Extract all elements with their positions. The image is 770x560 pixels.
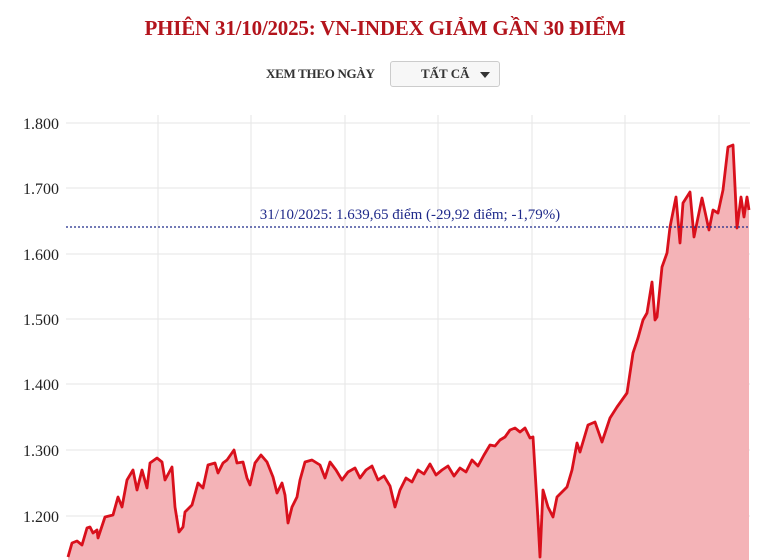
date selector control <box>266 61 500 87</box>
annotation label: 31/10/2025: 1.639,65 điểm (-29,92 điểm; -1,79%) <box>260 207 560 223</box>
title: PHIÊN 31/10/2025: VN-INDEX GIẢM GẦN 30 ĐIỂM <box>144 16 626 40</box>
y axis labels: 1.800 <box>23 116 59 133</box>
label: xem theo ngày: XEM THEO NGÀY <box>266 66 375 81</box>
y axis labels: 1.200 <box>23 509 59 526</box>
y axis labels: 1.500 <box>23 312 59 329</box>
y axis labels: 1.300 <box>23 443 59 460</box>
y axis labels <box>23 116 59 526</box>
y axis labels: 1.400 <box>23 377 59 394</box>
dropdown <box>390 61 500 87</box>
y axis labels: 1.700 <box>23 181 59 198</box>
dropdown: TẤT CÃ <box>421 66 470 81</box>
y axis labels: 1.600 <box>23 247 59 264</box>
area and line series <box>68 145 749 560</box>
